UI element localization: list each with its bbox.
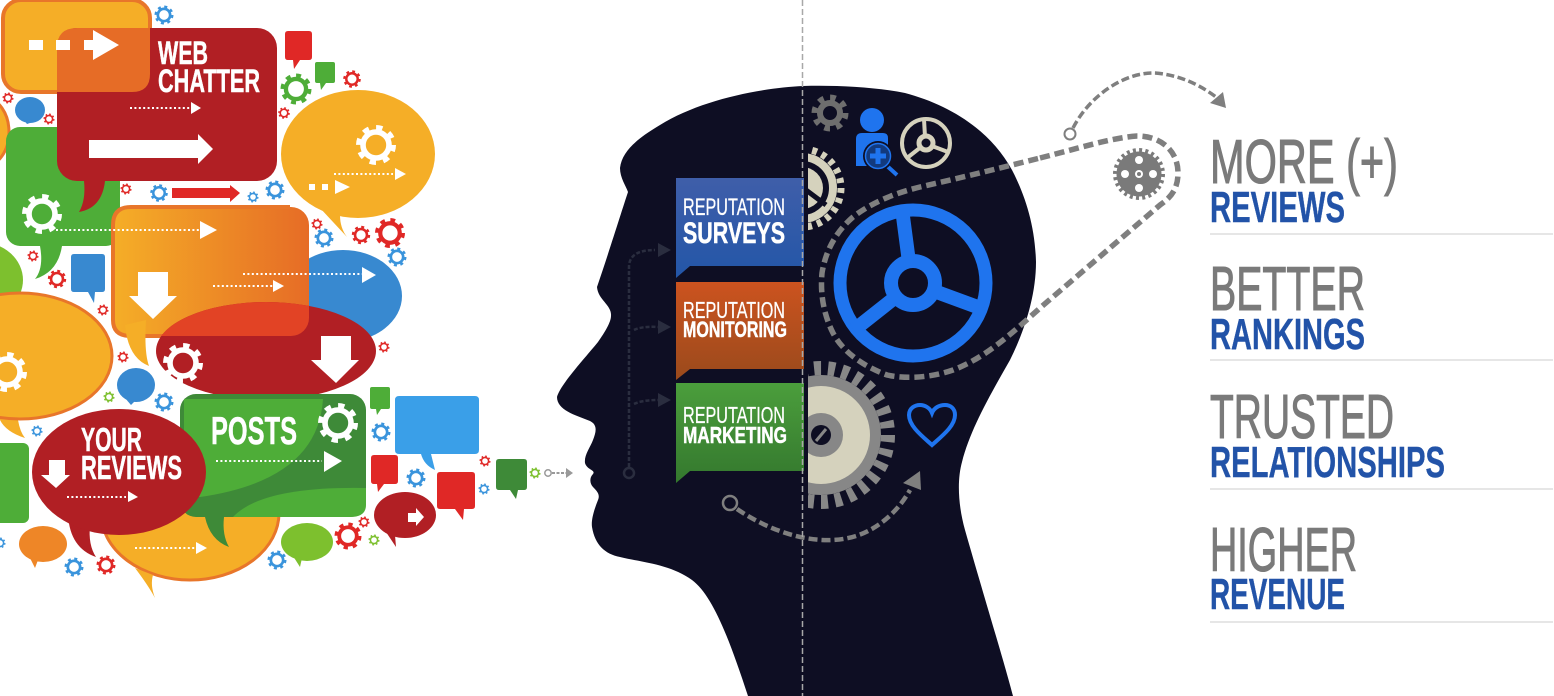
bubble: orange edge top left	[0, 98, 9, 166]
heading: posts: POSTS	[211, 410, 297, 453]
bubble: orange gradient with arrows	[113, 207, 309, 366]
heading: web chatter: CHATTER	[158, 63, 260, 99]
benefit: better rankings: RANKINGS	[1210, 311, 1365, 359]
icon: cream wheel	[902, 119, 950, 167]
head silhouette	[557, 86, 1036, 696]
ribbon: reputation monitoring: MONITORING	[683, 317, 787, 342]
icon: blue wheel	[840, 209, 986, 356]
small gears	[0, 7, 540, 575]
bubble: yellow bottom	[101, 446, 279, 598]
small bubbles	[15, 31, 527, 568]
benefit: better rankings	[1210, 255, 1553, 361]
heading: your reviews: REVIEWS	[81, 449, 182, 486]
bubble: lime left	[0, 242, 23, 318]
ribbon: reputation surveys: SURVEYS	[683, 217, 785, 250]
bubble: blue ellipse	[284, 250, 402, 342]
benefit: more reviews: REVIEWS	[1210, 184, 1345, 232]
benefit: more reviews: MORE (+)	[1210, 128, 1398, 197]
bubble: red ellipse with gear and arrow	[156, 302, 376, 400]
bubble: green left square	[6, 127, 120, 279]
bubble: yellow top right	[281, 90, 435, 237]
ribbon: reputation marketing: MARKETING	[683, 422, 787, 448]
icon: top cream gear	[808, 147, 844, 230]
benefit: trusted relationships: TRUSTED	[1210, 383, 1394, 452]
benefit: more reviews	[1210, 128, 1553, 235]
benefit: trusted relationships: RELATIONSHIPS	[1210, 439, 1445, 487]
icon: heart	[909, 405, 955, 445]
dotted arrows on orange bubble	[56, 221, 376, 292]
bubble: posts	[180, 394, 366, 547]
benefit: higher revenue	[1210, 516, 1553, 623]
ribbon: reputation marketing: REPUTATION	[683, 402, 785, 428]
heading: your reviews: YOUR	[81, 421, 142, 458]
benefit: trusted relationships	[1210, 383, 1553, 490]
ribbon: reputation surveys	[676, 178, 804, 278]
ribbon: reputation surveys: REPUTATION	[683, 194, 785, 221]
ribbon: reputation monitoring	[676, 282, 804, 380]
benefit: higher revenue: REVENUE	[1210, 571, 1345, 619]
ribbon: reputation monitoring: REPUTATION	[683, 297, 785, 323]
icon: lower gray gear	[808, 361, 895, 509]
bubble: green left lower rect	[0, 443, 29, 523]
bubble: web chatter	[29, 28, 277, 212]
icon: small gear on belt	[1115, 150, 1163, 198]
bubble: top orange square	[3, 0, 150, 92]
speech bubble cluster	[0, 0, 573, 598]
icon: belt dashed line	[821, 136, 1178, 377]
arrow: top curved	[1064, 73, 1226, 140]
heading: web chatter: WEB	[158, 35, 208, 71]
small gray arrow toward mouth	[545, 468, 573, 478]
dim arrows inside head	[624, 243, 671, 478]
icon: gray gear top	[815, 98, 845, 128]
red arrow	[172, 185, 240, 202]
ribbon: reputation marketing	[676, 383, 804, 483]
arrow: bottom curved	[723, 471, 921, 540]
benefit: higher revenue: HIGHER	[1210, 516, 1357, 585]
center dashed line	[802, 0, 804, 696]
benefit: better rankings: BETTER	[1210, 255, 1365, 324]
bubble: yellow left	[0, 293, 112, 438]
bubble: your reviews	[32, 409, 206, 557]
icon: person with magnifier	[856, 108, 897, 175]
